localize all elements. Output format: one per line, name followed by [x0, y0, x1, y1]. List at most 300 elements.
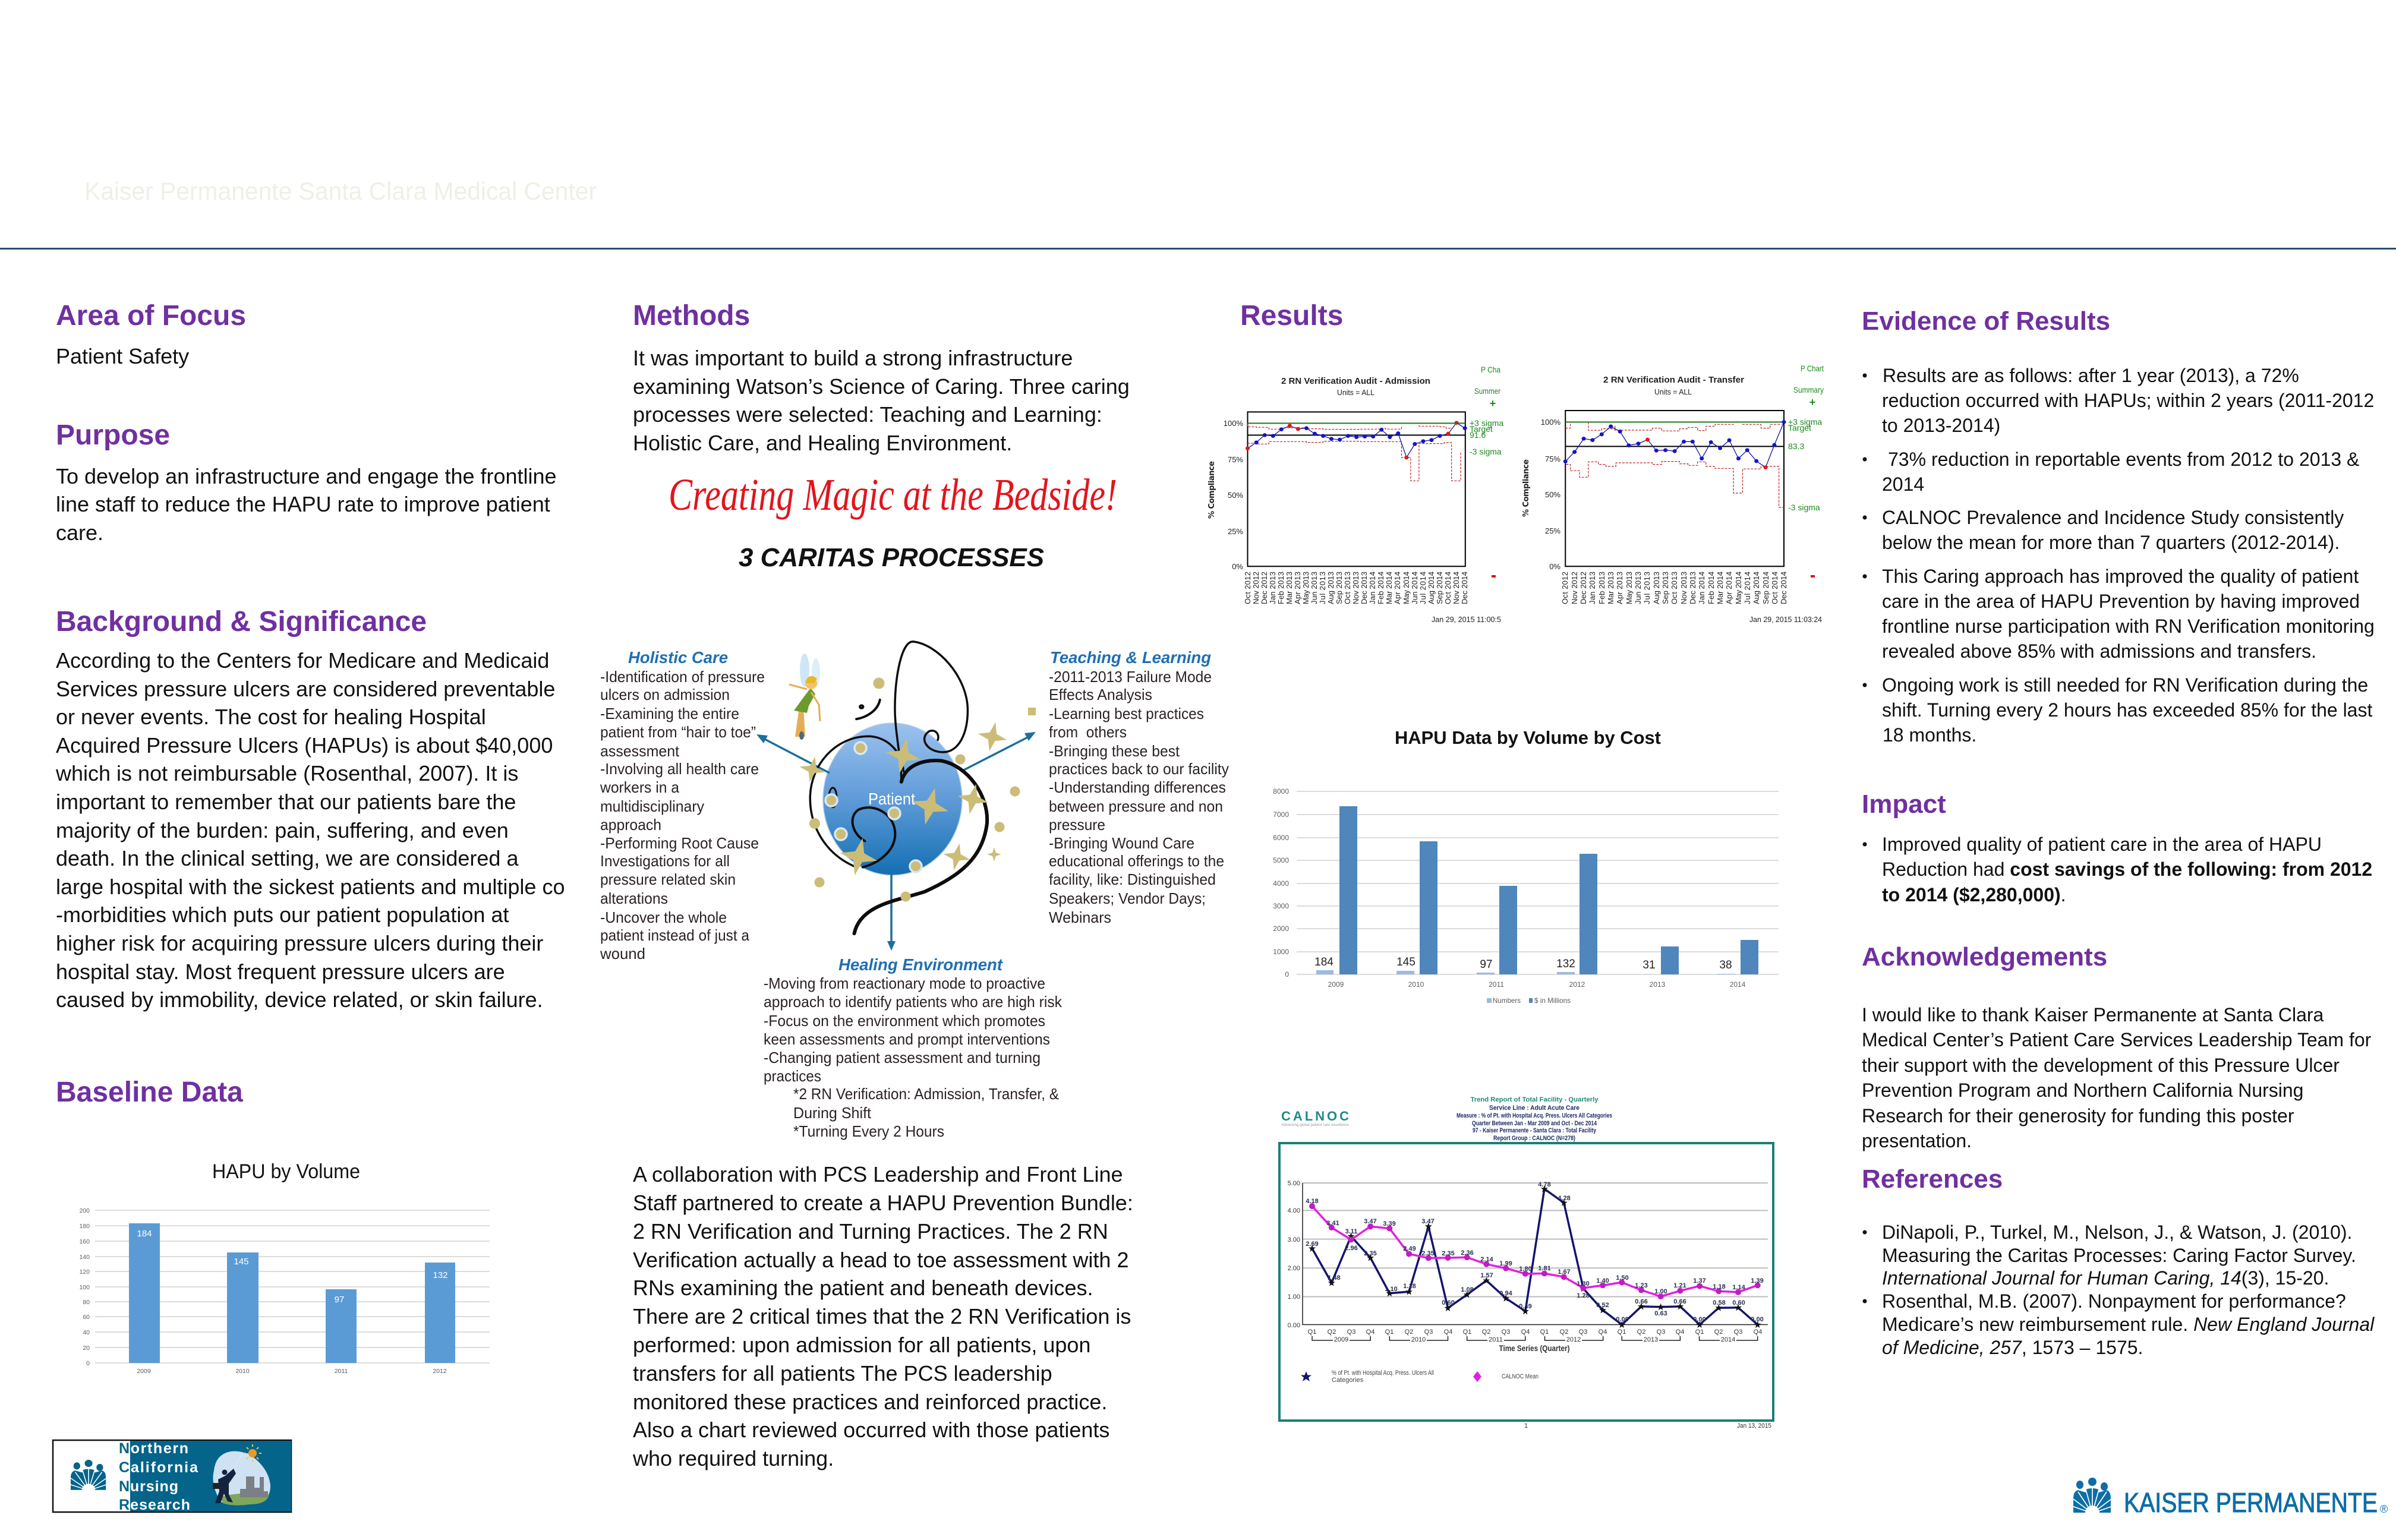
text: holistic care: [600, 648, 765, 962]
year labels: 2013: [1644, 1336, 1658, 1343]
heading: impact: Impact: [1862, 790, 1946, 819]
logo: Kaiser Permanente: [2072, 1478, 2388, 1518]
icon: people: [2072, 1478, 2113, 1513]
bars: numbers: [1316, 970, 1735, 974]
text: holistic care: -Involving all health care: [600, 760, 759, 778]
logo: CALNOC: Advancing global patient care excellence: [1281, 1124, 1350, 1127]
text: methods collaboration: RNs examining the patient and beneath devices.: [633, 1276, 1093, 1300]
text: methods collaboration: monitored these practices and reinforced practice.: [633, 1390, 1107, 1414]
text: methods collaboration: transfers for all patients The PCS leadership: [633, 1361, 1052, 1386]
quarter labels: Q1: [1540, 1328, 1549, 1336]
data labels: facility: 4.28: [1558, 1195, 1571, 1202]
quarter labels: Q1: [1308, 1328, 1316, 1336]
chart: HAPU by volume: 40: [83, 1329, 90, 1336]
data labels: CALNOC mean: 3.41: [1326, 1220, 1339, 1227]
quarter labels: Q3: [1734, 1328, 1742, 1336]
quarter labels: Q4: [1599, 1328, 1607, 1336]
text: healing environment: practices: [764, 1067, 821, 1085]
text: acknowledgements: I would like to thank Kaiser Permanente at Santa Clara: [1862, 1004, 2324, 1025]
text: healing environment: *Turning Every 2 Hours: [793, 1122, 944, 1140]
chart: RN verification admission: Jan 2014: [1368, 572, 1377, 604]
illustration: reaching figure: [213, 1444, 270, 1506]
quarter labels: Q4: [1676, 1328, 1684, 1336]
data labels: CALNOC mean: 2.49: [1403, 1245, 1416, 1252]
bar values: 145: [1396, 956, 1415, 968]
heading: baseline data: Baseline Data: [56, 1077, 243, 1108]
chart: RN verification transfer: May 2014: [1734, 572, 1743, 604]
data labels: facility: 1.28: [1577, 1292, 1590, 1299]
data labels: facility: 3.11: [1345, 1228, 1357, 1235]
text: background: important to remember that our patients bare the: [56, 790, 516, 814]
chart: HAPU data by volume by cost: 2009: [1328, 980, 1344, 989]
chart: RN verification admission: 50%: [1228, 491, 1243, 500]
text: teaching and learning: pressure: [1049, 816, 1105, 834]
quarter labels: Q2: [1328, 1328, 1336, 1336]
chart: RN verification admission: 2 RN Verification Audit - Admission: [1281, 376, 1430, 386]
text: teaching and learning: from others: [1049, 723, 1127, 741]
dots: [809, 677, 1036, 902]
text: acknowledgements: their support with the development of this Pressure Ulcer: [1862, 1055, 2340, 1076]
year labels: 2014: [1721, 1336, 1735, 1343]
text: holistic care: Holistic Care: [628, 648, 728, 667]
text: holistic care: patient from “hair to toe”: [600, 723, 756, 741]
text: teaching and learning: -Bringing Wound Care: [1049, 834, 1194, 852]
data labels: CALNOC mean: 1.14: [1732, 1284, 1746, 1291]
heading: acknowledgements: Acknowledgements: [1862, 942, 2107, 971]
year labels: [1333, 1336, 1736, 1343]
text: background: majority of the burden: pain, suffering, and even: [56, 818, 509, 842]
quarter labels: Q2: [1560, 1328, 1568, 1336]
bullets: evidence: revealed above 85% with admissions and transfers.: [1882, 640, 2316, 662]
panel: impact: [1862, 790, 2372, 905]
chart: RN verification admission: May 2014: [1402, 572, 1411, 604]
chart: RN verification transfer: +3 sigma: [1788, 417, 1822, 427]
text: teaching and learning: educational offerings to the: [1049, 852, 1224, 870]
quarter labels: Q4: [1521, 1328, 1530, 1336]
data labels: facility: 1.18: [1403, 1283, 1416, 1290]
bar values: 132: [1556, 958, 1575, 970]
text: purpose: line staff to reduce the HAPU rate to improve patient: [56, 492, 550, 516]
year labels: 2012: [433, 1368, 447, 1375]
chart: RN verification admission: Oct 2014: [1443, 572, 1452, 604]
text: purpose: To develop an infrastructure and engage the frontline: [56, 464, 557, 488]
data labels: facility: 2.69: [1306, 1241, 1319, 1248]
panel: acknowledgements: [1862, 942, 2372, 1151]
logo words: Northern: [119, 1440, 188, 1457]
subheading: 3 caritas processes: 3 CARITAS PROCESSES: [739, 543, 1044, 572]
data labels: CALNOC mean: 1.81: [1538, 1265, 1551, 1272]
text: acknowledgements: Prevention Program and Northern California Nursing: [1862, 1080, 2303, 1101]
text: healing environment: During Shift: [793, 1104, 872, 1122]
bar values: 184: [137, 1229, 152, 1239]
quarter labels: Q1: [1695, 1328, 1704, 1336]
text: background: or never events. The cost for healing Hospital: [56, 705, 486, 729]
data labels: CALNOC mean: 1.80: [1519, 1266, 1532, 1273]
text: methods collaboration: 2 RN Verification and Turning Practices. The 2 RN: [633, 1219, 1108, 1244]
chart: RN verification transfer: 2 RN Verification Audit - Transfer: [1603, 375, 1744, 385]
text: impact: Reduction had: [1882, 859, 2010, 880]
chart: CALNOC trend report: 1: [1524, 1422, 1528, 1429]
bullets: evidence: 18 months.: [1883, 724, 1976, 746]
bullets: evidence: to 2013-2014): [1882, 415, 2000, 436]
chart: RN verification transfer: [1522, 364, 1824, 624]
chart: RN verification transfer: 0%: [1549, 562, 1560, 571]
chart: RN verification admission: Nov 2012: [1251, 572, 1260, 604]
quarter labels: Q4: [1754, 1328, 1762, 1336]
chart: RN verification admission: Sep 2014: [1435, 572, 1444, 604]
logo words: Research: [119, 1497, 190, 1513]
heading: methods: Methods: [633, 300, 750, 332]
bar values: [137, 1229, 448, 1305]
data labels: facility: 0.00: [1616, 1316, 1629, 1323]
chart: HAPU by volume: 200: [79, 1207, 90, 1214]
series: CALNOC mean: [1312, 1206, 1758, 1296]
chart: RN verification transfer: Jul 2013: [1642, 572, 1651, 604]
chart: RN verification transfer: Feb 2013: [1597, 572, 1606, 604]
text: methods collaboration: who required turning.: [632, 1446, 834, 1470]
arrows: [756, 732, 1036, 951]
axis labels: 1.00: [1288, 1293, 1300, 1301]
logo: Kaiser Permanente: ®: [2380, 1503, 2388, 1515]
axis labels: 2.00: [1288, 1265, 1300, 1272]
chart: RN verification admission: 91.6: [1470, 430, 1486, 440]
chart: RN verification transfer: Aug 2014: [1752, 572, 1761, 604]
bar values: 145: [234, 1257, 249, 1267]
panel: methods: [600, 300, 1229, 1470]
bullets: evidence: reduction occurred with HAPUs; within 2 years (2011-2012: [1882, 390, 2374, 411]
panel: results: [1208, 300, 1824, 1429]
chart: HAPU data by volume by cost: 5000: [1273, 856, 1289, 864]
chart: HAPU data by volume by cost: 2000: [1273, 924, 1289, 933]
text: references: , 1573 – 1575.: [2022, 1337, 2143, 1358]
chart: RN verification transfer: Nov 2013: [1679, 572, 1688, 604]
text: teaching and learning: -Bringing these best: [1049, 742, 1180, 760]
chart: RN verification transfer: 75%: [1545, 455, 1560, 463]
data labels: facility: 0.94: [1499, 1290, 1513, 1297]
chart: RN verification admission: Mar 2014: [1385, 572, 1394, 604]
chart: RN verification transfer: Oct 2013: [1670, 572, 1679, 604]
bullets: evidence: frontline nurse participation with RN Verification monitoring: [1882, 616, 2375, 637]
data labels: CALNOC mean: 1.30: [1577, 1280, 1590, 1287]
legend: CALNOC Mean: [1502, 1373, 1539, 1380]
axis labels: 0.00: [1288, 1322, 1300, 1329]
axis labels: 3.00: [1288, 1236, 1300, 1244]
report titles: Quarter Between Jan - Mar 2009 and Oct - Dec 2014: [1472, 1120, 1597, 1127]
chart: RN verification admission: Dec 2014: [1460, 572, 1469, 604]
chart: RN verification transfer: Units = ALL: [1654, 387, 1692, 396]
bullets: evidence: [1862, 365, 2375, 746]
chart: HAPU by volume: 180: [79, 1223, 90, 1230]
chart: RN verification transfer: Nov 2012: [1570, 572, 1579, 604]
data labels: facility: 0.52: [1596, 1302, 1609, 1309]
icon: fairy: [789, 654, 820, 740]
chart: RN verification transfer: 100%: [1541, 418, 1560, 427]
chart: RN verification admission: Units = ALL: [1337, 388, 1374, 397]
chart: HAPU data by volume by cost: 2013: [1650, 980, 1666, 989]
year labels: 2010: [235, 1368, 250, 1375]
text: references: Measuring the Caritas Processes: Caring Factor Survey.: [1882, 1245, 2356, 1266]
series: facility: [1312, 1189, 1758, 1325]
text: holistic care: ulcers on admission: [600, 686, 730, 703]
bar values: 184: [1314, 956, 1333, 968]
legend: [1301, 1369, 1539, 1384]
text: impact: Improved quality of patient care in the area of HAPU: [1882, 834, 2322, 855]
chart: RN verification admission: % Compliance: [1208, 461, 1216, 519]
text: methods collaboration: There are 2 critical times that the 2 RN Verification is: [633, 1304, 1131, 1328]
bullets: evidence: below the mean for more than 7 quarters (2012-2014).: [1882, 532, 2340, 553]
logo: Northern California Nursing Research: [53, 1440, 291, 1513]
bullets: evidence: care in the area of HAPU Prevention by having improved: [1882, 591, 2360, 612]
text: holistic care: assessment: [600, 742, 680, 760]
data labels: facility: 0.58: [1713, 1299, 1726, 1307]
text: holistic care: approach: [600, 816, 661, 834]
text: impact: to 2014 ($2,280,000): [1882, 884, 2061, 905]
year labels: 2010: [1411, 1336, 1426, 1343]
text: holistic care: wound: [600, 945, 645, 962]
bullets: evidence: 73% reduction in reportable events from 2012 to 2013 &: [1888, 449, 2359, 470]
chart: HAPU by volume: 120: [79, 1268, 90, 1276]
quarter labels: [1308, 1328, 1762, 1336]
text: teaching and learning: -Understanding differences: [1049, 778, 1226, 796]
text: background: death. In the clinical setting, we are considered a: [56, 846, 519, 870]
text: holistic care: -Examining the entire: [600, 705, 739, 722]
bullets: evidence: Ongoing work is still needed for RN Verification during the: [1882, 674, 2368, 696]
year labels: 2009: [137, 1368, 151, 1375]
chart: RN verification transfer: Sep 2014: [1761, 572, 1770, 604]
text: holistic care: Investigations for all: [600, 852, 730, 870]
chart: RN verification transfer: Apr 2014: [1725, 572, 1733, 604]
text: background: higher risk for acquiring pressure ulcers during their: [56, 931, 543, 955]
bars: [129, 1223, 455, 1363]
data labels: CALNOC mean: 1.21: [1673, 1282, 1686, 1289]
report titles: 97 - Kaiser Permanente - Santa Clara : Total Facility: [1473, 1127, 1597, 1134]
panel: area of focus: [56, 300, 246, 368]
chart: RN verification transfer: +: [1809, 396, 1815, 408]
data labels: facility: 1.48: [1328, 1274, 1341, 1282]
text: background: Services pressure ulcers are considered preventable: [56, 677, 555, 701]
header rule: [0, 248, 2396, 250]
chart: HAPU data by volume by cost: 2010: [1408, 980, 1424, 989]
legend: Numbers: [1493, 996, 1521, 1005]
chart: HAPU by volume: [79, 1160, 490, 1375]
text: background: Acquired Pressure Ulcers (HAPUs) is about $40,000: [56, 733, 553, 758]
data labels: CALNOC mean: 3.47: [1364, 1218, 1377, 1225]
quarter labels: Q1: [1385, 1328, 1394, 1336]
swirl: [810, 642, 987, 933]
text: background: which is not reimbursable (Rosenthal, 2007). It is: [55, 761, 518, 785]
data labels: CALNOC mean: 1.39: [1751, 1277, 1764, 1285]
chart: RN verification admission: Dec 2013: [1360, 572, 1369, 604]
data labels: CALNOC mean: [1306, 1198, 1764, 1295]
text: teaching and learning: Teaching & Learning: [1050, 648, 1211, 667]
text: holistic care: -Identification of pressure: [600, 668, 765, 686]
text: teaching and learning: -Learning best practices: [1049, 705, 1204, 722]
text: teaching and learning: between pressure and non: [1049, 797, 1223, 815]
text: references: of Medicine, 257: [1882, 1337, 2022, 1358]
data labels: CALNOC mean: 3.39: [1383, 1220, 1396, 1227]
tagline: creating magic: Creating Magic at the Bedside!: [669, 470, 1117, 520]
logo words: Nursing: [119, 1478, 178, 1495]
heading: references: References: [1862, 1165, 2003, 1194]
text: teaching and learning: [1049, 648, 1229, 926]
text: impact: [1862, 834, 2372, 905]
chart: RN verification admission: 75%: [1228, 455, 1243, 464]
report titles: Measure : % of Pt. with Hospital Acq. Press. Ulcers All Categories: [1456, 1112, 1612, 1119]
bar values: [1314, 956, 1732, 971]
legend: $ in Millions: [1534, 996, 1571, 1005]
heading: results: Results: [1240, 300, 1343, 332]
legend: % of Pt. with Hospital Acq. Press. Ulcers All: [1332, 1369, 1434, 1377]
chart: HAPU by volume: 140: [79, 1254, 90, 1261]
chart: RN verification transfer: Oct 2014: [1770, 572, 1779, 604]
data labels: facility: [1306, 1181, 1764, 1323]
heading: purpose: Purpose: [56, 419, 170, 451]
chart: RN verification admission: [1208, 365, 1503, 624]
chart: HAPU data by volume by cost: 7000: [1273, 810, 1289, 819]
chart: RN verification admission: -3 sigma: [1470, 447, 1502, 456]
text: references: DiNapoli, P., Turkel, M., Nelson, J., & Watson, J. (2010).: [1882, 1222, 2352, 1243]
quarter labels: Q2: [1637, 1328, 1645, 1336]
text: healing environment: keen assessments and prompt interventions: [764, 1030, 1050, 1048]
chart: RN verification admission: Oct 2012: [1243, 572, 1252, 604]
text: holistic care: alterations: [600, 889, 668, 907]
data labels: facility: 1.10: [1385, 1286, 1398, 1293]
text: healing environment: [764, 955, 1063, 1140]
report titles: Trend Report of Total Facility - Quarterly: [1470, 1096, 1599, 1103]
year labels: 2011: [335, 1368, 348, 1375]
chart: RN verification admission: Jul 2014: [1418, 572, 1427, 604]
chart: CALNOC trend report: Jan 13, 2015: [1737, 1422, 1771, 1429]
chart: RN verification admission: Oct 2013: [1343, 572, 1352, 604]
text: methods collaboration: Also a chart reviewed occurred with those patients: [633, 1418, 1109, 1442]
quarter labels: Q3: [1657, 1328, 1665, 1336]
bar values: 97: [335, 1295, 344, 1305]
chart: RN verification transfer: Dec 2012: [1579, 572, 1588, 604]
chart: RN verification transfer: P Chart: [1801, 364, 1824, 373]
quarter labels: Q3: [1502, 1328, 1510, 1336]
axis labels: [1288, 1180, 1300, 1329]
chart: HAPU data by volume by cost: 6000: [1273, 834, 1289, 842]
data labels: CALNOC mean: 1.23: [1635, 1282, 1648, 1289]
chart: RN verification admission: Mar 2013: [1285, 572, 1294, 604]
chart: HAPU data by volume by cost: 8000: [1273, 787, 1289, 796]
chart: RN verification admission: Dec 2012: [1260, 572, 1269, 604]
report titles: [1456, 1096, 1612, 1142]
report titles: Report Group : CALNOC (N=278): [1493, 1135, 1575, 1142]
data labels: CALNOC mean: 2.14: [1480, 1256, 1494, 1263]
year labels: 2012: [1566, 1336, 1581, 1343]
icon: people: [70, 1460, 108, 1491]
chart: HAPU data by volume by cost: 2014: [1730, 980, 1746, 989]
text: area of focus: Patient Safety: [56, 344, 189, 368]
text: references: Rosenthal, M.B. (2007). Nonpayment for performance?: [1882, 1290, 2346, 1312]
text: methods intro: processes were selected: Teaching and Learning:: [633, 402, 1102, 427]
axis labels: 4.00: [1288, 1207, 1300, 1214]
text: methods collaboration: Staff partnered to create a HAPU Prevention Bundle:: [633, 1191, 1133, 1215]
chart: RN verification transfer: Mar 2013: [1606, 572, 1615, 604]
data labels: facility: 2.35: [1364, 1250, 1377, 1257]
chart: HAPU by volume: 20: [83, 1345, 90, 1352]
chart: RN verification transfer: Jan 2013: [1588, 572, 1597, 604]
quarter labels: Q3: [1579, 1328, 1587, 1336]
bar values: 97: [1480, 958, 1493, 971]
axis title: Time Series (Quarter): [1499, 1343, 1570, 1353]
data labels: CALNOC mean: 1.67: [1558, 1268, 1571, 1276]
heading: area of focus: Area of Focus: [56, 300, 246, 332]
text: background: According to the Centers for Medicare and Medicaid: [56, 648, 549, 673]
heading: background: Background & Significance: [56, 606, 427, 638]
text: holistic care: -Uncover the whole: [600, 908, 727, 926]
data labels: CALNOC mean: 4.18: [1306, 1198, 1319, 1205]
chart: RN verification admission: +3 sigma: [1470, 418, 1503, 428]
center label: Patient: [868, 790, 915, 808]
text: holistic care: workers in a: [600, 778, 680, 796]
chart: RN verification admission: Summer: [1474, 386, 1500, 396]
stars: [797, 719, 1010, 879]
chart: RN verification admission: May 2013: [1301, 572, 1310, 604]
chart: RN verification admission: +: [1490, 397, 1496, 409]
text: background: large hospital with the sickest patients and multiple co: [56, 875, 565, 899]
chart: HAPU by volume: 80: [83, 1299, 90, 1306]
text: purpose: care.: [56, 520, 103, 545]
text: holistic care: patient instead of just a: [600, 926, 750, 944]
year labels: [137, 1368, 447, 1375]
chart: RN verification admission: Aug 2014: [1427, 572, 1436, 604]
globe: [823, 723, 962, 875]
data labels: facility: 4.78: [1538, 1181, 1551, 1188]
bullets: evidence: shift. Turning every 2 hours has exceeded 85% for the last: [1882, 699, 2372, 721]
chart: RN verification admission: Feb 2014: [1376, 572, 1385, 604]
panel: purpose: [56, 419, 557, 545]
text: acknowledgements: presentation.: [1862, 1130, 1972, 1151]
data labels: CALNOC mean: 1.37: [1693, 1277, 1706, 1285]
text: acknowledgements: Research for their generosity for funding this poster: [1862, 1105, 2294, 1126]
data labels: facility: 0.49: [1519, 1303, 1532, 1310]
chart: RN verification admission: Nov 2013: [1351, 572, 1360, 604]
chart: HAPU by volume: 100: [79, 1284, 90, 1291]
text: methods collaboration: A collaboration with PCS Leadership and Front Line: [633, 1162, 1123, 1186]
chart: HAPU data by volume by cost: [1273, 727, 1779, 1005]
data labels: CALNOC mean: 2.96: [1345, 1245, 1358, 1252]
quarter labels: Q1: [1463, 1328, 1471, 1336]
heading: evidence of results: Evidence of Results: [1862, 307, 2110, 336]
bar values: 31: [1642, 959, 1656, 971]
chart: RN verification transfer: Apr 2013: [1615, 572, 1624, 604]
text: healing environment: -Moving from reactionary mode to proactive: [764, 974, 1045, 992]
chart: RN verification admission: Target: [1470, 424, 1493, 434]
text: healing environment: -Changing patient assessment and turning: [764, 1049, 1041, 1066]
text: teaching and learning: -2011-2013 Failure Mode: [1049, 668, 1212, 686]
chart: RN verification transfer: Jun 2013: [1634, 572, 1642, 604]
text: teaching and learning: practices back to our facility: [1049, 760, 1229, 778]
report titles: Service Line : Adult Acute Care: [1489, 1104, 1580, 1112]
chart: RN verification admission: 100%: [1224, 419, 1243, 428]
panel: baseline data: [56, 1077, 490, 1375]
markers: facility: [1309, 1185, 1761, 1328]
chart: RN verification admission: Jun 2014: [1410, 572, 1419, 604]
chart title: HAPU Data by Volume by Cost: [1395, 727, 1661, 748]
text: references: New England Journal: [2193, 1314, 2375, 1335]
chart: RN verification transfer: -3 sigma: [1788, 503, 1820, 512]
chart: HAPU data by volume by cost: 2011: [1489, 980, 1504, 989]
chart: RN verification transfer: Feb 2014: [1707, 572, 1716, 604]
legend: Categories: [1332, 1377, 1364, 1384]
bar values: 132: [433, 1270, 448, 1280]
chart: RN verification transfer: % Compliance: [1522, 459, 1531, 517]
logo words: California: [119, 1459, 198, 1476]
chart: RN verification transfer: Oct 2012: [1560, 572, 1569, 604]
text: healing environment: approach to identify patients who are high risk: [764, 993, 1063, 1011]
